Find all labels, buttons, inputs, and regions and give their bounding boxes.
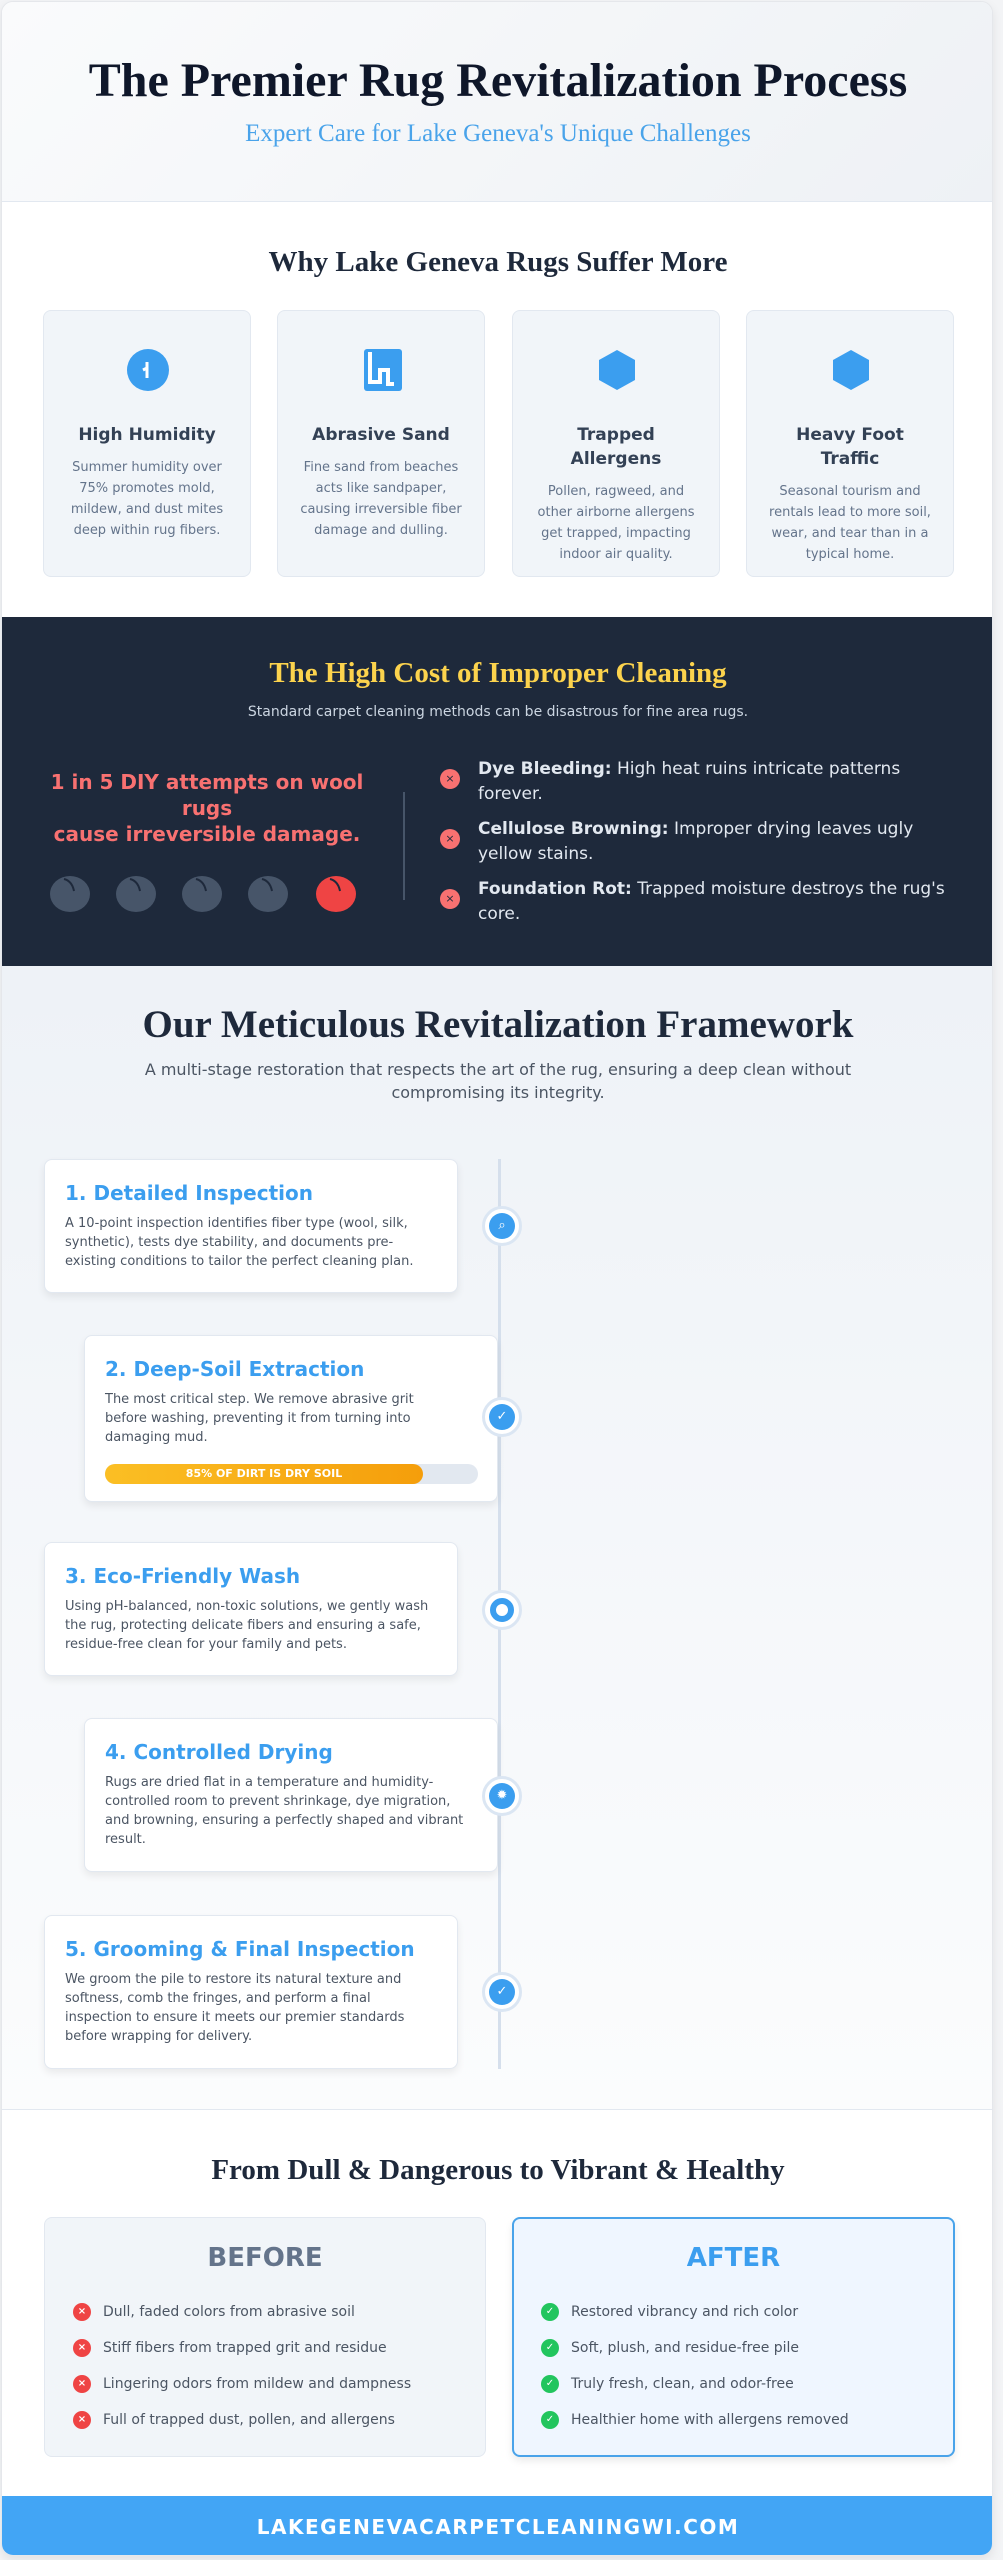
card: traffic: Heavy Foot: [796, 425, 904, 445]
step 4: [84, 1718, 498, 1872]
list: risks: ×: [445, 772, 455, 785]
step 3: 3. Eco-Friendly Wash: [65, 1564, 300, 1588]
card: allergens: Allergens: [571, 449, 661, 469]
card: humidity: Summer humidity over 75% promotes mold, mildew, and dust mites deep within rug fibers.: [71, 460, 223, 538]
list: risks: ×: [445, 892, 455, 905]
panel: before: Full of trapped dust, pollen, and allergens: [103, 2412, 395, 2428]
panel: before: Lingering odors from mildew and dampness: [103, 2376, 411, 2392]
step 2: The most critical step. We remove abrasive grit before washing, preventing it from turning into damaging mud.: [105, 1392, 414, 1445]
node 4: ✹: [497, 1788, 507, 1803]
panel: before: Stiff fibers from trapped grit and residue: [103, 2340, 387, 2356]
step 5: 5. Grooming & Final Inspection: [65, 1937, 415, 1961]
step 1: 1. Detailed Inspection: [65, 1181, 313, 1205]
panel: after: Soft, plush, and residue-free pile: [571, 2340, 799, 2356]
heading: The High Cost of Improper Cleaning: [269, 657, 727, 689]
card: humidity: [43, 310, 251, 577]
panel: after: ✓: [546, 2414, 554, 2425]
node 5: ✓: [497, 1984, 507, 1999]
subtitle: A multi-stage restoration that respects the art of the rug, ensuring a deep clean without compromising its integrity.: [145, 1060, 851, 1102]
stat: 1 in 5 DIY attempts on wool rugs: [51, 770, 363, 820]
step 4: Rugs are dried flat in a temperature and humidity-controlled room to prevent shrinkage, dye migration, and browning, ensuring a perfectly shaped and vibrant result.: [105, 1775, 463, 1847]
panel: before: [44, 2217, 486, 2457]
panel: after: ✓: [546, 2342, 554, 2353]
step 3: [44, 1542, 458, 1676]
footer: LAKEGENEVACARPETCLEANINGWI.COM: [257, 2515, 739, 2539]
card: sand: Abrasive Sand: [312, 425, 450, 445]
header: [2, 2, 994, 202]
list: risks: [440, 759, 945, 924]
step 5: We groom the pile to restore its natural texture and softness, comb the fringes, and perform a final inspection to ensure it meets our premier standards before wrapping for delivery.: [65, 1972, 404, 2044]
node 3: [482, 1590, 522, 1630]
panel: before: Dull, faded colors from abrasive soil: [103, 2304, 355, 2320]
step 1: [44, 1159, 458, 1293]
heading: before/after: From Dull & Dangerous to Vibrant & Healthy: [211, 2154, 785, 2186]
divider: [403, 792, 405, 900]
step 2: [84, 1335, 498, 1502]
icon: hexagon: [833, 350, 869, 390]
step 4: 4. Controlled Drying: [105, 1740, 333, 1764]
panel: framework: [2, 966, 994, 2110]
subtitle: Expert Care for Lake Geneva's Unique Challenges: [245, 120, 751, 147]
panel: after: ✓: [546, 2378, 554, 2389]
icon: hexagon: [599, 350, 635, 390]
footer: [2, 2496, 994, 2558]
section heading: why: Why Lake Geneva Rugs Suffer More: [269, 246, 727, 278]
panel: before: ×: [78, 2378, 86, 2389]
panel: before: ×: [78, 2342, 86, 2353]
progress bar: 85% OF DIRT IS DRY SOIL: [186, 1467, 342, 1480]
node 2: ✓: [497, 1409, 507, 1424]
panel: before: ×: [78, 2306, 86, 2317]
panel: after: Truly fresh, clean, and odor-free: [571, 2376, 794, 2392]
card: sand: [277, 310, 485, 577]
card: traffic: Seasonal tourism and rentals lead to more soil, wear, and tear than in a typical home.: [769, 484, 931, 562]
icon row: 5 rugs: [50, 876, 356, 912]
panel: after: Restored vibrancy and rich color: [571, 2304, 798, 2320]
panel: after: AFTER: [687, 2243, 780, 2273]
stat: cause irreversible damage.: [54, 822, 360, 846]
card: allergens: [512, 310, 720, 577]
panel: after: Healthier home with allergens removed: [571, 2412, 849, 2428]
heading: Our Meticulous Revitalization Framework: [143, 1003, 853, 1046]
panel: before: ×: [78, 2414, 86, 2425]
subtitle: Standard carpet cleaning methods can be disastrous for fine area rugs.: [248, 704, 748, 720]
card: allergens: Pollen, ragweed, and other airborne allergens get trapped, impacting indoor air quality.: [538, 484, 694, 562]
step 5: [44, 1915, 458, 2069]
node 4: [482, 1776, 522, 1816]
progress bar: [105, 1464, 478, 1484]
card: humidity: High Humidity: [78, 425, 216, 445]
panel: high cost: [2, 617, 994, 966]
card: allergens: Trapped: [577, 425, 655, 445]
icon: sand: [364, 349, 402, 391]
node 5: [482, 1972, 522, 2012]
step 3: Using pH-balanced, non-toxic solutions, we gently wash the rug, protecting delicate fibers and ensuring a safe, residue-free clean for your family and pets.: [65, 1599, 428, 1652]
node 1: ⌕: [498, 1218, 506, 1233]
card: traffic: [746, 310, 954, 577]
list: risks: ×: [445, 832, 455, 845]
card: traffic: Traffic: [821, 449, 879, 469]
card: sand: Fine sand from beaches acts like sandpaper, causing irreversible fiber damage and dulling.: [300, 460, 462, 538]
list: risks: Foundation Rot: Trapped moisture destroys the rug's core.: [478, 879, 945, 924]
step 2: 2. Deep-Soil Extraction: [105, 1357, 364, 1381]
step 1: A 10-point inspection identifies fiber type (wool, silk, synthetic), tests dye stability, and documents pre-existing conditions to tailor the perfect cleaning plan.: [65, 1216, 414, 1269]
node 2: [482, 1397, 522, 1437]
panel: after: ✓: [546, 2306, 554, 2317]
list: risks: Cellulose Browning: Improper drying leaves ugly yellow stains.: [478, 819, 913, 864]
node 1: [482, 1206, 522, 1246]
icon: drop: [127, 349, 169, 391]
timeline line: [498, 1159, 501, 2069]
panel: after: [512, 2217, 955, 2457]
stat: [51, 770, 363, 846]
list: risks: Dye Bleeding: High heat ruins intricate patterns forever.: [478, 759, 900, 804]
panel: before: BEFORE: [207, 2243, 323, 2273]
title: The Premier Rug Revitalization Process: [89, 54, 907, 107]
